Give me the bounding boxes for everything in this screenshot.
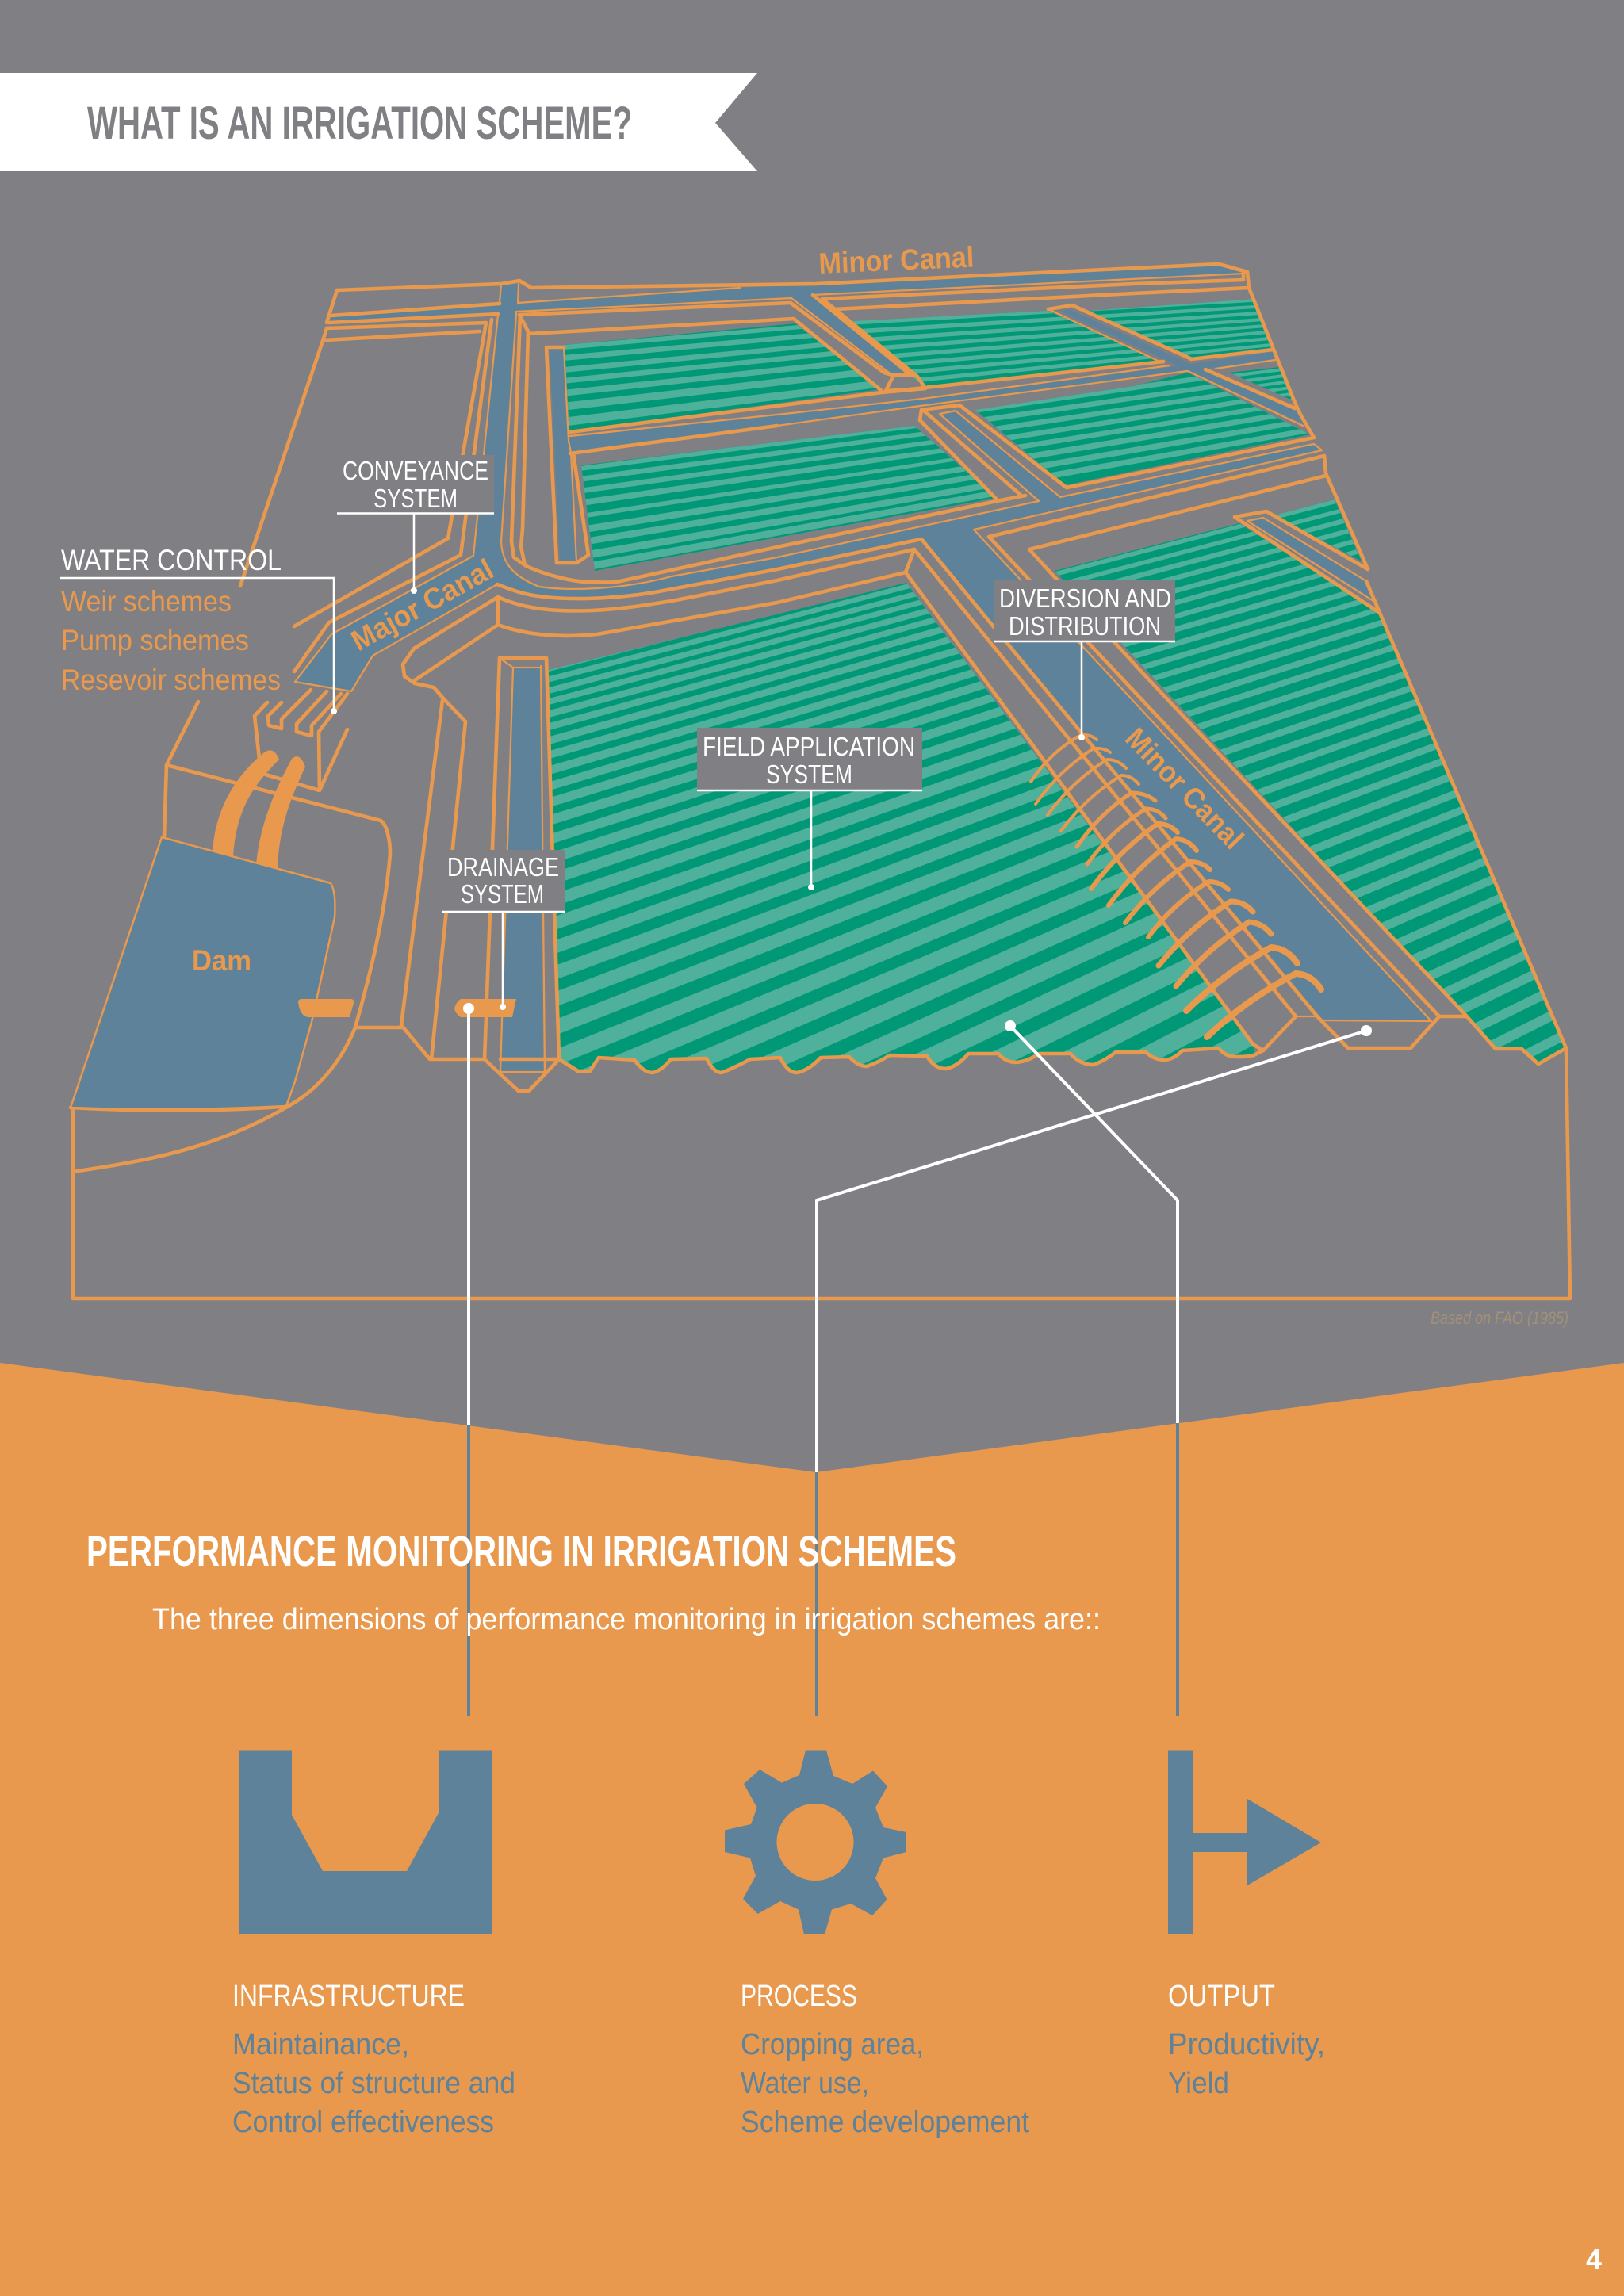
green field: centre left xyxy=(581,426,994,571)
icon: gear (process) xyxy=(725,1751,906,1934)
column: infrastructure: Maintainance, xyxy=(232,2028,409,2061)
green field: centre right xyxy=(975,373,1310,485)
label: water control: Pump schemes xyxy=(61,624,249,656)
column: output xyxy=(1168,1980,1325,2100)
dam label: Dam xyxy=(192,944,251,977)
column: process: Scheme developement xyxy=(741,2106,1029,2139)
heading: performance monitoring: PERFORMANCE MONITORING IN IRRIGATION SCHEMES xyxy=(86,1528,956,1575)
icon: canal cross-section (infrastructure) xyxy=(239,1751,492,1934)
dam reservoir xyxy=(71,837,335,1109)
canal bank outlines xyxy=(71,264,1570,1299)
panel: performance monitoring background xyxy=(0,1363,1624,2296)
connector lines to dimensions xyxy=(463,1003,1372,1716)
column: infrastructure: Status of structure and xyxy=(232,2067,515,2100)
irrigation scheme diagram xyxy=(68,246,1572,1463)
canal banks on fields xyxy=(1235,511,1380,613)
icon: siphon pipes xyxy=(213,750,305,868)
label: field application system xyxy=(697,728,922,890)
column: output: Yield xyxy=(1168,2067,1229,2100)
label: field application system: SYSTEM xyxy=(766,760,852,789)
title banner xyxy=(0,73,757,171)
green field: upper left xyxy=(565,323,877,430)
label: drainage system: DRAINAGE xyxy=(447,852,559,882)
column: output: OUTPUT xyxy=(1168,1980,1275,2013)
column: infrastructure: Control effectiveness xyxy=(232,2106,494,2139)
title banner: WHAT IS AN IRRIGATION SCHEME? xyxy=(87,98,632,149)
canal label: top minor canal: Minor Canal xyxy=(818,240,975,280)
label: conveyance system: SYSTEM xyxy=(373,484,458,513)
label: field application system: FIELD APPLICATION xyxy=(703,732,915,761)
note: source: Based on FAO (1985) xyxy=(1431,1308,1568,1328)
canal water network xyxy=(295,266,1429,1074)
green field: right field xyxy=(1055,499,1564,1062)
column: process: PROCESS xyxy=(741,1980,857,2013)
label: water control: WATER CONTROL xyxy=(61,544,282,576)
canal label: major canal: Major Canal xyxy=(346,553,499,657)
column: process xyxy=(741,1980,1029,2139)
column: infrastructure: INFRASTRUCTURE xyxy=(232,1980,465,2013)
column: infrastructure xyxy=(232,1980,515,2139)
icon: output arrow xyxy=(1168,1751,1321,1934)
water control gates xyxy=(255,690,347,790)
label: drainage system xyxy=(442,850,565,1010)
green field: main field xyxy=(549,583,1254,1071)
page number: 4 xyxy=(1586,2243,1602,2275)
column: output: Productivity, xyxy=(1168,2028,1325,2061)
label: water control xyxy=(60,544,337,714)
label: diversion and distribution xyxy=(994,580,1175,740)
label: water control: Weir schemes xyxy=(61,585,232,618)
column: process: Cropping area, xyxy=(741,2028,924,2061)
intro text: The three dimensions of performance monitoring in irrigation schemes are:: xyxy=(152,1603,1101,1636)
label: diversion and distribution: DISTRIBUTION xyxy=(1009,611,1161,641)
column: process: Water use, xyxy=(741,2067,869,2100)
label: diversion and distribution: DIVERSION AND xyxy=(999,584,1171,613)
drain outlet xyxy=(454,999,516,1017)
label: conveyance system xyxy=(337,455,494,594)
dam spillway xyxy=(298,999,354,1017)
label: water control: Resevoir schemes xyxy=(61,664,281,696)
siphons along minor canal xyxy=(1031,735,1321,1037)
canal label: lower minor canal: Minor Canal xyxy=(1119,721,1250,855)
label: drainage system: SYSTEM xyxy=(461,879,544,909)
label: conveyance system: CONVEYANCE xyxy=(343,456,488,485)
green field: upper middle xyxy=(852,299,1293,400)
